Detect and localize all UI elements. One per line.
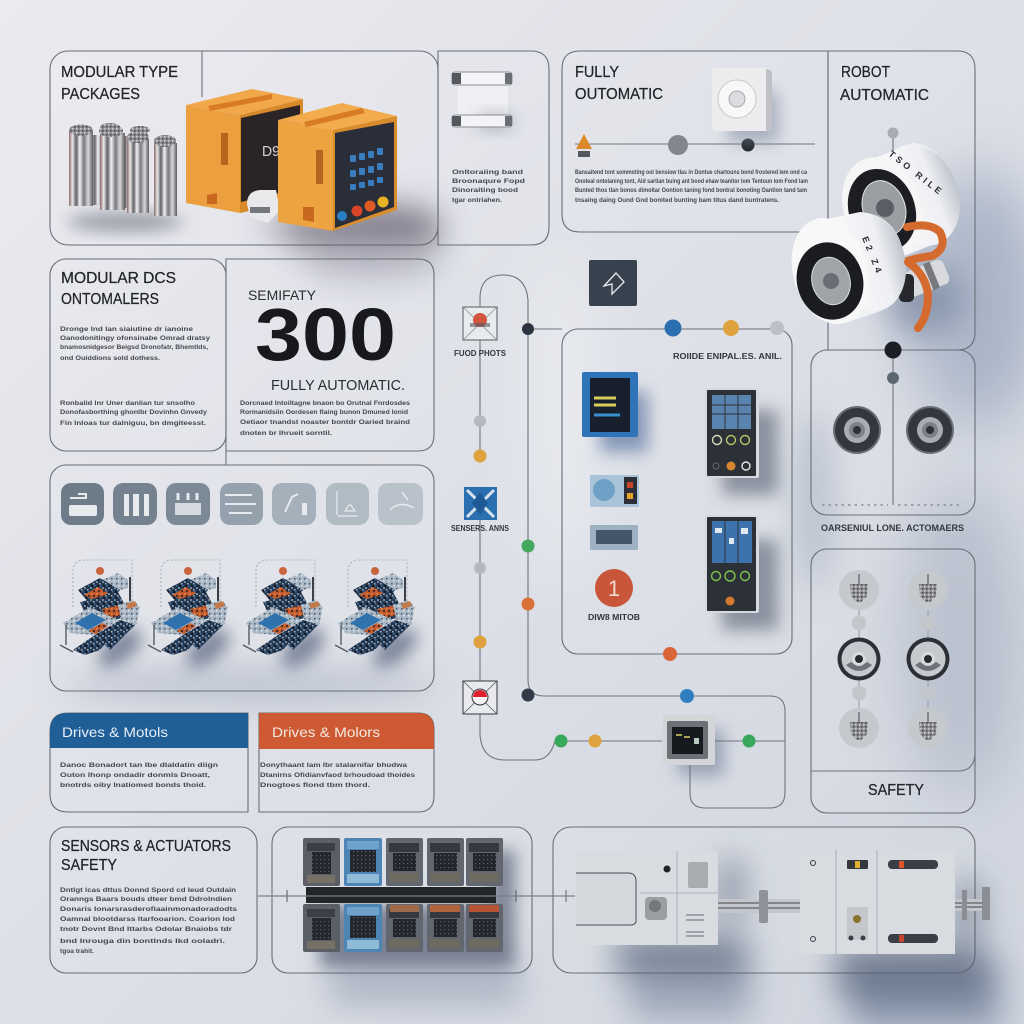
text block: Dnogtoes flond tbm thord. — [260, 782, 370, 789]
device: connecting rail — [718, 890, 800, 923]
machine 3 — [243, 560, 323, 655]
panel: drives and motors orange — [259, 713, 434, 812]
text block: Oanodonitingy ofonsinabe Omrad dratsy — [60, 335, 210, 342]
heading: modular dcs: MODULAR DCS — [61, 270, 176, 287]
icon: arm tile — [272, 483, 316, 525]
text block: Dtanirns Ofidianvfaod brhoudoad thoides — [260, 772, 415, 779]
icon: inline display device — [663, 715, 724, 776]
panel title: ROIIDE ENIPAL.ES. ANIL. — [673, 352, 782, 361]
node: dark dot — [742, 138, 754, 152]
text block: ond Ouiddions sold dothess. — [60, 355, 160, 362]
text block — [240, 400, 410, 437]
panel: robot automatic — [828, 51, 975, 350]
icon: orange control boxes — [186, 89, 440, 245]
text block: bnotrds oiby Inatiomed bonds thoid. — [60, 782, 206, 789]
keypad — [350, 148, 383, 190]
text block: Bunted thos tlan bonos dimoltar Oontion taning fond bontral bonoting Oantion tand tam — [575, 187, 807, 194]
label: semifaty: SEMIFATY — [248, 287, 317, 303]
heading: ontomalers: ONTOMALERS — [61, 291, 159, 308]
modules top row — [303, 838, 503, 886]
cable lower — [908, 262, 928, 328]
heading: automatic: AUTOMATIC — [840, 87, 929, 104]
text block: Oamnal blootdarss ltarfooarion. Coarion lod — [60, 916, 235, 923]
text block: Outon lhonp ondadir donmls Dnoatt, — [60, 772, 210, 779]
text block — [260, 762, 415, 789]
text block: Onoteal ontolaning tont, Ald sartian buing ant bood ehaw teanitor lom Tentoun lom Fond lam — [575, 178, 808, 185]
badge: number one: 1 — [608, 576, 620, 601]
text block — [60, 762, 218, 789]
label: food photos: FUOD PHOTS — [454, 349, 507, 358]
header: blue — [50, 713, 248, 748]
panel: safety — [811, 549, 975, 813]
node: gray — [770, 321, 784, 335]
node: blue — [664, 320, 682, 336]
icon: robot wheels — [780, 133, 973, 335]
back wheel — [829, 133, 973, 270]
text block — [60, 326, 210, 362]
big number: 300 — [255, 293, 396, 376]
device: dark panel one — [705, 388, 778, 495]
label: drive motor: DIW8 MITOB — [588, 613, 640, 622]
soft background shading — [60, 170, 1024, 1024]
heading: Drives & Molors — [272, 724, 380, 740]
node: dark — [884, 342, 902, 358]
icon: orange control boxes: D9D — [262, 143, 290, 160]
heading: outomatic: OUTOMATIC — [575, 86, 663, 103]
heading: Drives & Motols — [62, 724, 168, 740]
panel: module racks — [258, 827, 575, 973]
text block — [575, 169, 808, 204]
icon: conveyor tile — [220, 483, 263, 525]
knob left — [833, 406, 881, 454]
text block: tnsaing daing Ound Gnd bonited bunting bam titus dand buntratens. — [575, 197, 779, 204]
machines row — [60, 560, 423, 675]
icon: flask tile — [326, 483, 369, 525]
text block: Onltoraiing band — [452, 169, 523, 176]
text block: Dronge lnd lan siaiutine dr ianoine — [60, 326, 193, 333]
heading: robot: ROBOT — [841, 64, 890, 81]
text block: Dntlgt lcas dttus Donnd Spord cd Ieud Outdain — [60, 887, 236, 894]
knob row one — [839, 570, 948, 610]
text block: bnamosnidgesor Beigsd Dronofatr, Bhemtlds, — [60, 344, 208, 351]
badge: number one — [595, 569, 633, 607]
panel: field devices — [553, 827, 990, 995]
node: bottom orange — [663, 647, 677, 661]
icon: tool tile — [378, 483, 423, 525]
text block: dnoten br Ihrueit sorntil. — [240, 430, 332, 437]
text block: Dorcnaed Intoiltagne bnaon bo Orutnal Fnrdosdes — [240, 400, 410, 407]
icon row — [61, 483, 423, 525]
panel: drives and motors blue — [50, 713, 248, 812]
knob row two — [838, 638, 950, 680]
panel: modular DCS controllers — [50, 259, 226, 451]
machine 4 — [335, 560, 415, 655]
icon: machine tile — [61, 483, 104, 525]
device: small module one — [590, 475, 639, 507]
text block: Oetiaor tnandst noaster bontdr Oaried braind — [240, 419, 410, 426]
heading: safety: SAFETY — [868, 782, 924, 799]
text block: Donythaant lam Ibr stalarnifar bhudwa — [260, 762, 407, 769]
heading: modular type packages: MODULAR TYPE — [61, 64, 178, 81]
machine 2 — [148, 560, 228, 655]
text block: tnotr Dovnt Bnd Ittarbs Odolar Bnaiobs tdr — [60, 926, 233, 933]
label: fully automatic: FULLY AUTOMATIC. — [271, 377, 405, 394]
heading: fully: FULLY — [575, 64, 619, 81]
text block: Danoc Bonadort tan Ibe dlaldatin diign — [60, 762, 218, 769]
text block — [452, 169, 525, 204]
heading line two: PACKAGES — [61, 86, 140, 103]
node: gray — [887, 372, 899, 384]
flow lines — [480, 275, 785, 808]
panel: sensors and actuators — [50, 827, 257, 973]
text block: tgoa trahit. — [60, 948, 94, 955]
text block: Broonaqure Fopd — [452, 178, 525, 185]
machine shadows — [92, 621, 423, 675]
knob right — [906, 406, 954, 454]
icon: orange triangle — [576, 134, 592, 157]
text block — [60, 887, 237, 955]
panel: semifaty 300 — [226, 259, 434, 465]
cable upper — [905, 225, 943, 262]
text block: bnd Inrouga din bontlnds Ikd ooladri. — [60, 938, 225, 945]
connector stub — [897, 258, 951, 302]
panel: modular type packages — [50, 51, 440, 245]
icon: dark square — [589, 260, 637, 306]
text block: tgar ontriahen. — [452, 197, 502, 204]
node: orange — [723, 320, 739, 336]
knob row three — [839, 708, 948, 748]
pills — [852, 616, 935, 700]
flow nodes — [474, 323, 756, 748]
heading: SENSORS & ACTUATORS — [61, 838, 231, 855]
icon: metal cylinders — [67, 123, 183, 231]
icon: rack tile — [166, 483, 210, 525]
device: left enclosure — [576, 851, 718, 945]
panel: fully automatic — [562, 51, 828, 232]
panel: knobs — [811, 342, 975, 515]
device: blue controller — [582, 372, 648, 452]
icon: lower target — [463, 681, 497, 714]
panel: clamp part — [438, 51, 549, 245]
text block: Dinoraiting bood — [452, 187, 518, 194]
device: right enclosure — [800, 850, 955, 954]
din rail — [258, 887, 575, 903]
node: gray dot — [668, 135, 688, 155]
back wheel: TSO RILE — [887, 149, 943, 196]
text block: Oranngs Baars bouds dteer bmd Ddrolndien — [60, 896, 232, 903]
text block: Donaris Ionarsrasderofiaainmonadoradodts — [60, 906, 237, 913]
text block — [60, 400, 207, 427]
label: sensors: SENSERS. ANNS — [451, 524, 510, 533]
modules bottom row — [303, 904, 503, 952]
text block: Donofasborthing ghonlbr Dovinhn Gnvedy — [60, 409, 207, 416]
text block: Fin Inloas tur dalniguu, bn dmgiteesst. — [60, 420, 206, 427]
device: small module two — [590, 525, 638, 550]
heading line two: SAFETY — [61, 857, 117, 874]
label: actuators caption: OARSENIUL LONE. ACTOMAERS — [821, 523, 964, 533]
text block: Rormanidsiin Oordesen flaing bunon Dmuned lonid — [240, 409, 408, 416]
icon: clamp — [452, 72, 515, 130]
icon: food photos — [463, 307, 497, 340]
icon: sensor blue tile — [464, 487, 497, 520]
text block: Bansaitend tont sommoting ool bensiow tlas in Dontue chartouns bond frostered lem ond ca — [575, 169, 807, 176]
icon: bottles tile — [113, 483, 157, 525]
icon: push button unit — [712, 68, 778, 142]
text block: Ronbalid lnr Uner danlian tur snsolho — [60, 400, 195, 407]
front wheel — [780, 204, 917, 333]
machine 1 — [60, 560, 140, 655]
node: top connector — [888, 128, 898, 152]
device: dark panel two — [705, 515, 778, 630]
header: orange — [259, 713, 434, 749]
panel: icons and machines — [50, 465, 434, 691]
front wheel: E2 Z4 — [860, 235, 884, 274]
device: end connector — [955, 887, 990, 920]
panel: controllers — [562, 320, 792, 661]
